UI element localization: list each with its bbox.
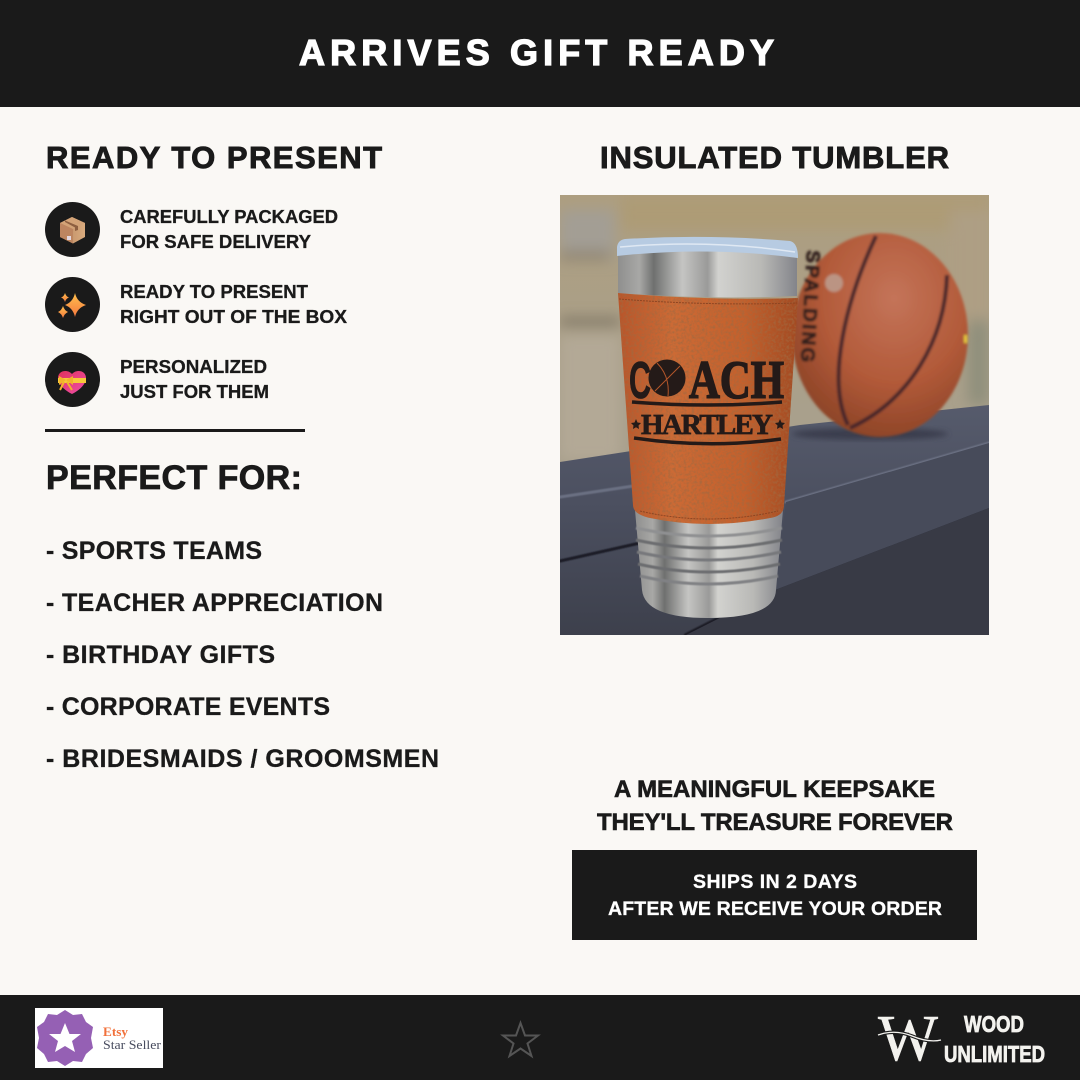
callout: shipping: AFTER WE RECEIVE YOUR ORDER (608, 898, 942, 920)
engraving: C (629, 352, 651, 410)
tagline (597, 776, 953, 836)
text: ready to present: READY TO PRESENT (120, 281, 309, 302)
icon: sparkles (58, 293, 86, 318)
list: occasions: - SPORTS TEAMS (46, 537, 262, 565)
heading: perfect for: PERFECT FOR: (46, 459, 302, 497)
benefit: personalized (45, 352, 269, 407)
leather sleeve (618, 293, 798, 524)
tumbler lower steel (635, 510, 783, 618)
engraving: HARTLEY (641, 409, 773, 441)
brand lettering on ball: SPALDING (796, 250, 823, 363)
title: ARRIVES GIFT READY (299, 32, 774, 73)
panel: ready to present (45, 140, 382, 407)
text: carefully packaged: FOR SAFE DELIVERY (120, 231, 312, 252)
logo: wood unlimited: UNLIMITED (944, 1041, 1045, 1067)
table plank shading (686, 508, 989, 635)
callout: shipping (572, 850, 977, 940)
engraving: ACH (689, 350, 784, 410)
brick wall texture (560, 195, 989, 460)
tagline: THEY'LL TREASURE FOREVER (597, 809, 953, 836)
benefit: carefully packaged (45, 202, 338, 257)
list: occasions: - BRIDESMAIDS / GROOMSMEN (46, 745, 439, 773)
callout: shipping: SHIPS IN 2 DAYS (693, 871, 857, 893)
text: personalized: PERSONALIZED (120, 356, 267, 377)
tagline: A MEANINGFUL KEEPSAKE (614, 776, 935, 803)
text: carefully packaged (120, 206, 338, 252)
logo: wood unlimited (878, 1002, 1045, 1075)
logo: wood unlimited: WOOD (964, 1011, 1024, 1037)
text: ready to present: RIGHT OUT OF THE BOX (120, 306, 348, 327)
panel: perfect for (46, 459, 439, 773)
list: occasions (46, 537, 439, 773)
benefit: ready to present (45, 277, 348, 332)
basketball (792, 233, 968, 437)
photo: engraved tumbler with basketball (560, 195, 989, 635)
list: occasions: - CORPORATE EVENTS (46, 693, 330, 721)
table top (560, 405, 989, 635)
text: carefully packaged: CAREFULLY PACKAGED (120, 206, 338, 227)
badge: etsy star seller: Star Seller (103, 1038, 162, 1052)
shadow under ball (792, 428, 948, 440)
heading: ready to present: READY TO PRESENT (46, 140, 382, 175)
tumbler lid (617, 237, 798, 258)
footer bar (0, 995, 1080, 1080)
text: personalized (120, 356, 269, 402)
badge: etsy star seller (35, 1008, 163, 1068)
tumbler upper steel (618, 251, 797, 297)
engraving (629, 350, 785, 444)
header banner (0, 0, 1080, 107)
text: personalized: JUST FOR THEM (120, 381, 269, 402)
icon: gift heart (58, 371, 86, 394)
list: occasions: - TEACHER APPRECIATION (46, 589, 383, 617)
list: occasions: - BIRTHDAY GIFTS (46, 641, 275, 669)
heading: insulated tumbler: INSULATED TUMBLER (600, 140, 949, 175)
tumbler (610, 237, 805, 618)
icon: star outline (503, 1023, 538, 1056)
logo: wood unlimited: W (878, 1002, 939, 1075)
icon: package (60, 217, 85, 244)
text: ready to present (120, 281, 348, 327)
badge: etsy star seller: Etsy (103, 1025, 129, 1039)
